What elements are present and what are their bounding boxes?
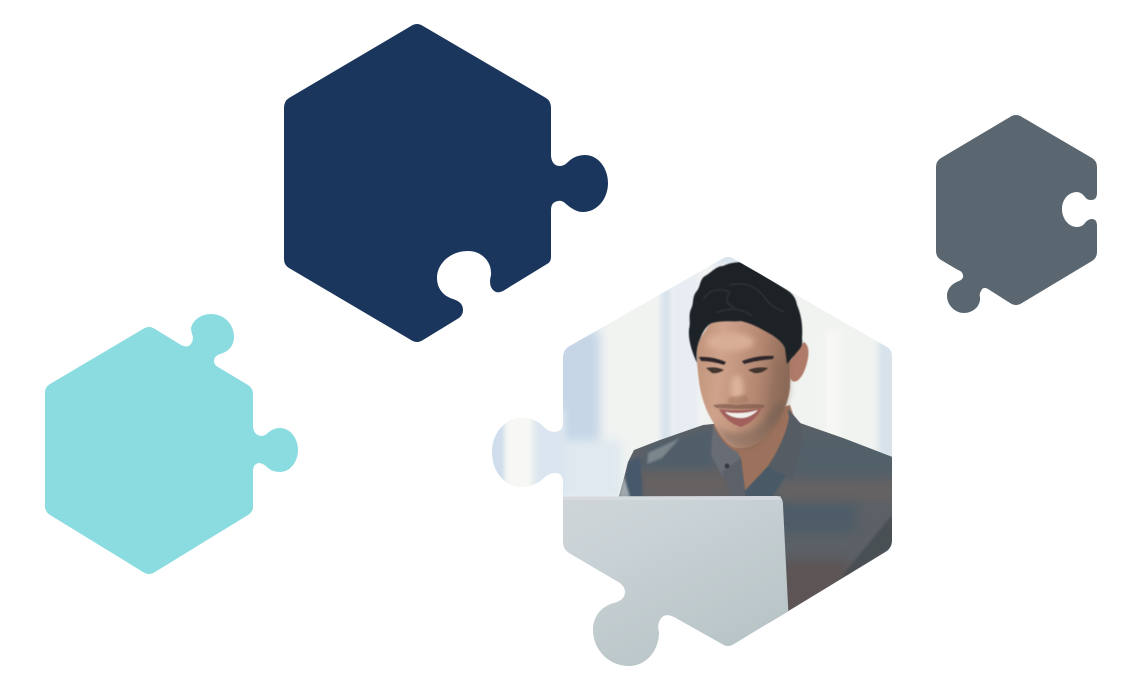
neck <box>713 405 798 490</box>
laptop <box>563 496 788 666</box>
face <box>696 316 791 448</box>
forehead highlight <box>706 333 754 351</box>
nose shadow <box>727 395 749 404</box>
right cheek shadow <box>786 378 793 406</box>
photo background: bright office windows <box>492 257 892 496</box>
puzzle piece: teal hexagon <box>45 314 298 574</box>
photo puzzle piece: man at laptop <box>492 257 892 666</box>
collar <box>711 409 803 497</box>
shirt <box>619 414 892 623</box>
puzzle piece: navy hexagon <box>284 24 608 342</box>
ear <box>790 342 808 382</box>
hair <box>689 262 802 364</box>
puzzle piece: grey hexagon <box>936 115 1097 313</box>
stubble <box>717 403 783 449</box>
nose highlight <box>731 375 743 401</box>
smile <box>713 404 765 427</box>
eyebrows <box>699 356 774 365</box>
hair highlights <box>703 284 785 316</box>
eyes <box>706 367 768 373</box>
